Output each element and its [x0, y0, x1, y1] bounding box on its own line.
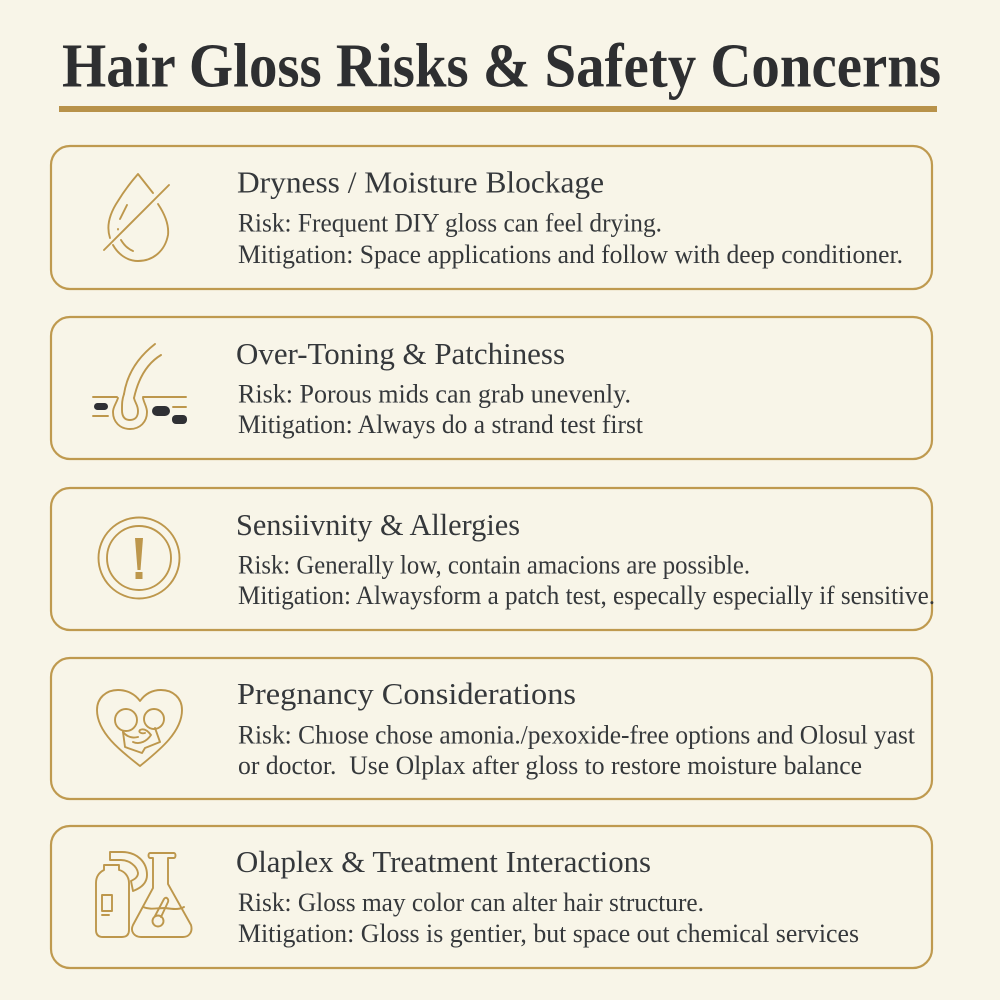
panel: over-toning: [51, 317, 932, 459]
icon: hair follicle: [93, 344, 187, 429]
heading: Dryness / Moisture Blockage: [237, 164, 604, 200]
heading: Olaplex & Treatment Interactions: [236, 844, 651, 879]
panel: olaplex: [51, 826, 932, 968]
mitigation text: Mitigation: Gloss is gentier, but space out chemical services: [238, 918, 859, 948]
title underline: [59, 106, 937, 112]
mitigation text: Mitigation: Always do a strand test first: [238, 409, 644, 439]
risk text: Risk: Generally low, contain amacions are possible.: [238, 550, 750, 580]
panel: pregnancy: [51, 658, 932, 799]
heading: Sensiivnity & Allergies: [236, 507, 520, 542]
risk text: Risk: Chıose chose amonia./pexoxide-free options and Olosul yast: [238, 720, 916, 750]
icon: bottle and flask: [96, 852, 192, 937]
icon: crossed-out water drop: [104, 174, 169, 261]
heading: Over-Toning & Patchiness: [236, 336, 565, 371]
panel: dryness: [51, 146, 932, 289]
icon: heart with parent and child: [97, 690, 182, 766]
risk text: Risk: Frequent DIY gloss can feel drying.: [238, 208, 662, 238]
mitigation text: Mitigation: Space applications and follow with deep conditioner.: [238, 239, 903, 269]
title: Hair Gloss Risks & Safety Concerns: [62, 32, 941, 100]
heading: Pregnancy Considerations: [237, 676, 576, 711]
risk text: Risk: Porous mids can grab unevenly.: [238, 378, 631, 408]
mitigation text: Mitigation: Alwaysform a patch test, especally especially if sensitive.: [238, 580, 935, 610]
second text line: or doctor. Use Olplax after gloss to restore moisture balance: [238, 750, 862, 780]
panel: sensitivity: [51, 488, 935, 630]
risk text: Risk: Gloss may color can alter hair structure.: [238, 887, 704, 917]
icon: warning circle: [98, 518, 180, 598]
